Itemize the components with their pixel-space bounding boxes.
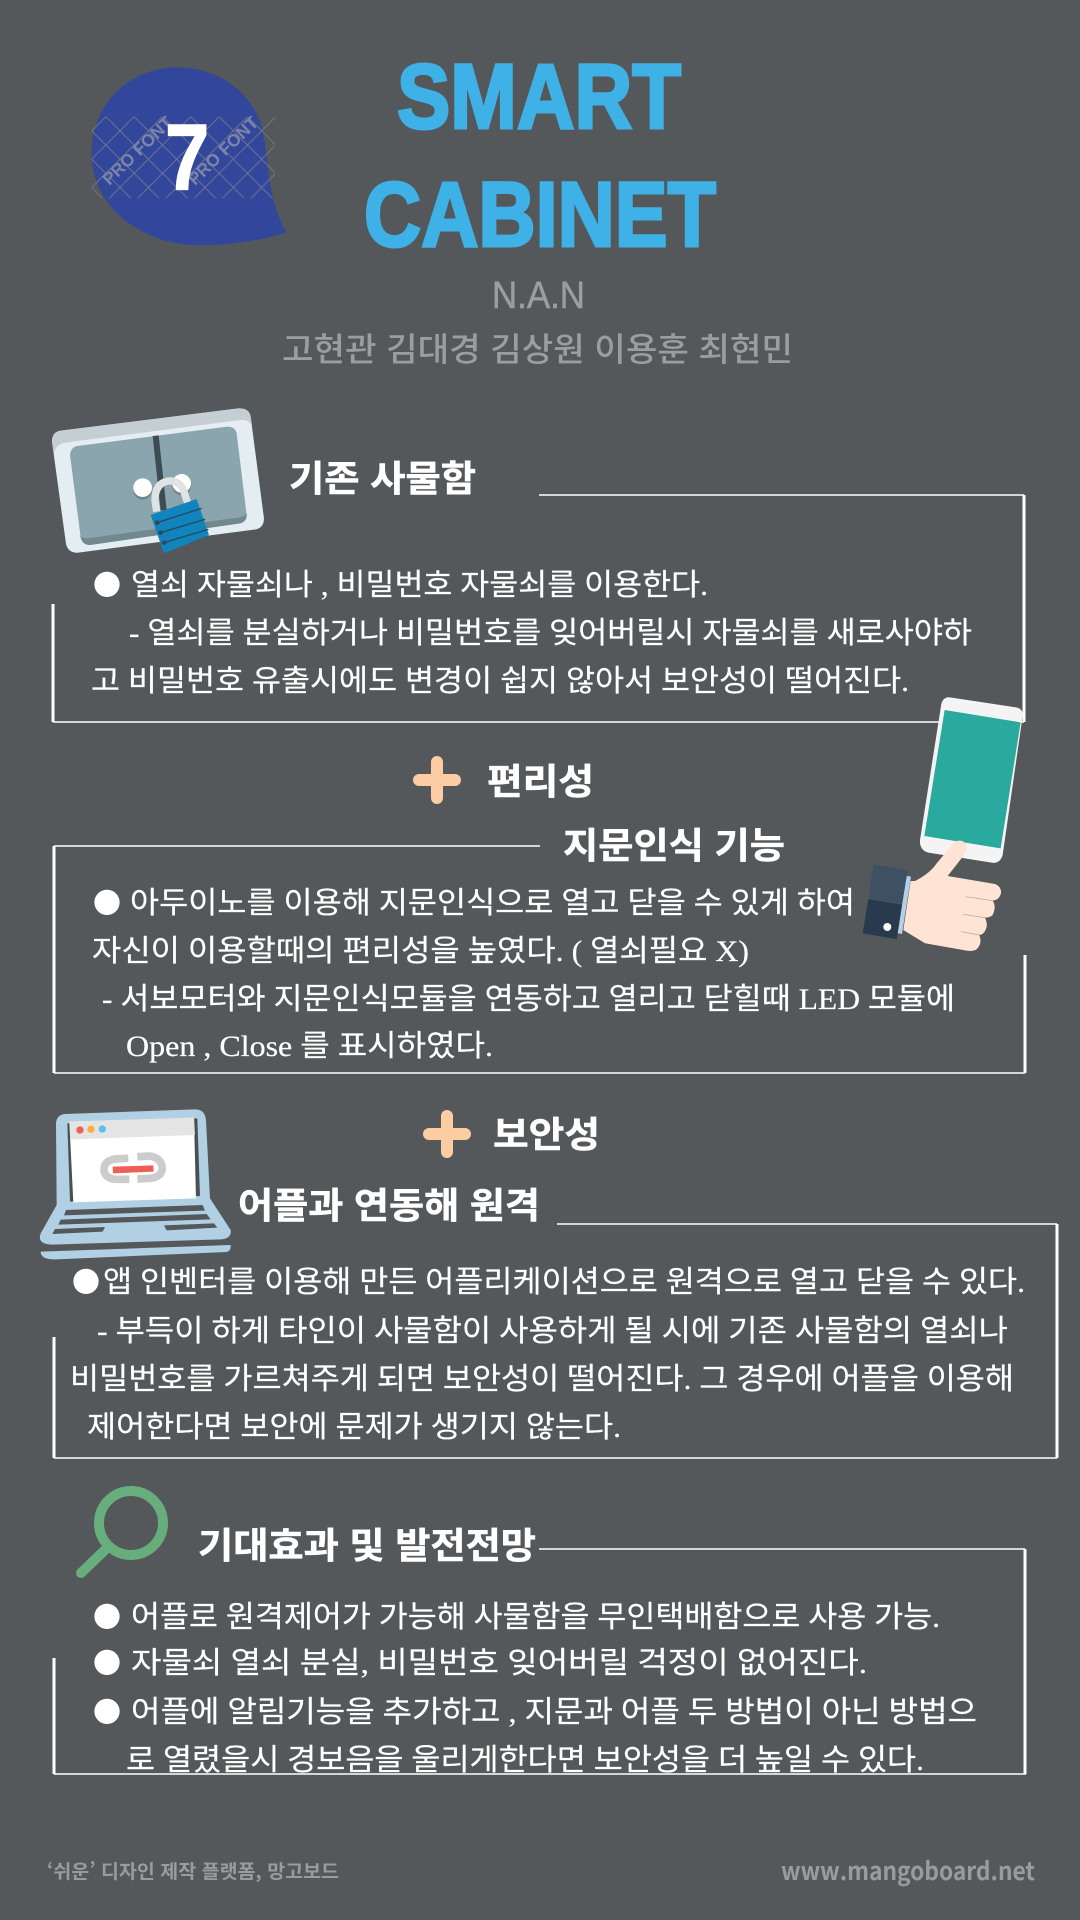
bullet 1: ● bbox=[93, 1596, 121, 1636]
watermark pattern: PRO FONT bbox=[98, 112, 177, 189]
heading: 기대효과 및 발전전망 bbox=[198, 1525, 536, 1566]
speech bubble bbox=[92, 67, 287, 245]
footer url: www.mangoboard.net bbox=[781, 1852, 1035, 1888]
detail text line 1: - 열쇠를 분실하거나 비밀번호를 잊어버릴시 자물쇠를 새로사야하 bbox=[129, 617, 972, 650]
icon: hand holding phone bbox=[863, 697, 1023, 951]
bullet 3 line 1: 어플에 알림기능을 추가하고 , 지문과 어플 두 방법이 아닌 방법으 bbox=[131, 1696, 977, 1729]
detail line 2: Open , Close 를 표시하였다. bbox=[126, 1030, 493, 1063]
bullet text: ● bbox=[93, 564, 121, 604]
bullet text: 열쇠 자물쇠나 , 비밀번호 자물쇠를 이용한다. bbox=[131, 569, 708, 602]
bullet line: 앱 인벤터를 이용해 만든 어플리케이션으로 원격으로 열고 닫을 수 있다. bbox=[103, 1266, 1025, 1299]
detail line 1: - 부득이 하게 타인이 사물함이 사용하게 될 시에 기존 사물함의 열쇠나 bbox=[97, 1315, 1008, 1348]
sleeve bbox=[868, 864, 908, 904]
bullet 2: 자물쇠 열쇠 분실, 비밀번호 잊어버릴 걱정이 없어진다. bbox=[131, 1647, 867, 1680]
phone bbox=[920, 697, 1023, 863]
frame bbox=[54, 1549, 1026, 1774]
watermark pattern: PRO FONT bbox=[184, 112, 262, 189]
title: CABINET bbox=[364, 164, 716, 266]
bullet 3 line 2: 로 열렸을시 경보음을 울리게한다면 보안성을 더 높일 수 있다. bbox=[126, 1744, 924, 1777]
icon: laptop bbox=[40, 1109, 231, 1259]
icon: plus bbox=[413, 756, 461, 804]
heading: convenience: 편리성 bbox=[487, 761, 594, 802]
team members: 고현관 김대경 김상원 이용훈 최현민 bbox=[282, 331, 793, 368]
detail line 2: 비밀번호를 가르쳐주게 되면 보안성이 떨어진다. 그 경우에 어플을 이용해 bbox=[70, 1363, 1014, 1396]
heading: 기존 사물함 bbox=[289, 458, 476, 499]
panel: existing cabinet bbox=[53, 458, 1024, 722]
heading: 어플과 연동해 원격 bbox=[238, 1185, 540, 1226]
panel: remote app bbox=[54, 1185, 1057, 1458]
detail text line 2: 고 비밀번호 유출시에도 변경이 쉽지 않아서 보안성이 떨어진다. bbox=[91, 665, 909, 698]
title: SMART bbox=[397, 46, 681, 148]
heading: security: 보안성 bbox=[493, 1114, 600, 1155]
panel: expected effects bbox=[54, 1525, 1026, 1777]
hand bbox=[903, 841, 1001, 951]
bullet 1: 어플로 원격제어가 가능해 사물함을 무인택배함으로 사용 가능. bbox=[131, 1601, 940, 1634]
number 7: 7 bbox=[165, 106, 209, 210]
heading: 지문인식 기능 bbox=[563, 825, 785, 866]
frame bbox=[53, 495, 1024, 722]
detail line 1: - 서보모터와 지문인식모듈을 연동하고 열리고 닫힐때 LED 모듈에 bbox=[102, 983, 955, 1016]
footer bbox=[47, 1852, 1035, 1888]
footer tagline: ‘쉬운’ 디자인 제작 플랫폼, 망고보드 bbox=[47, 1857, 339, 1884]
frame bbox=[54, 1224, 1057, 1458]
panel: fingerprint bbox=[54, 825, 1025, 1073]
plus: convenience bbox=[413, 756, 594, 804]
detail line 3: 제어한다면 보안에 문제가 생기지 않는다. bbox=[87, 1411, 621, 1444]
title bbox=[364, 46, 716, 266]
frame bbox=[54, 846, 1025, 1073]
bullet line: ● bbox=[72, 1261, 100, 1301]
bullet 3 line 1: ● bbox=[93, 1691, 121, 1731]
bullet line 2: 자신이 이용할때의 편리성을 높였다. ( 열쇠필요 X) bbox=[92, 935, 749, 968]
bullet 2: ● bbox=[93, 1642, 121, 1682]
team name: N.A.N bbox=[492, 275, 585, 317]
icon: magnifier bbox=[81, 1491, 163, 1573]
icon: locked cabinet bbox=[52, 408, 264, 553]
watermark pattern bbox=[92, 112, 275, 198]
cuff bbox=[898, 876, 911, 934]
bullet line: 아두이노를 이용해 지문인식으로 열고 닫을 수 있게 하여 bbox=[130, 887, 855, 920]
phone screen bbox=[924, 710, 1021, 848]
icon: plus bbox=[423, 1110, 471, 1158]
bullet line: ● bbox=[93, 882, 121, 922]
plus: security bbox=[423, 1110, 600, 1158]
number badge bbox=[92, 67, 287, 245]
